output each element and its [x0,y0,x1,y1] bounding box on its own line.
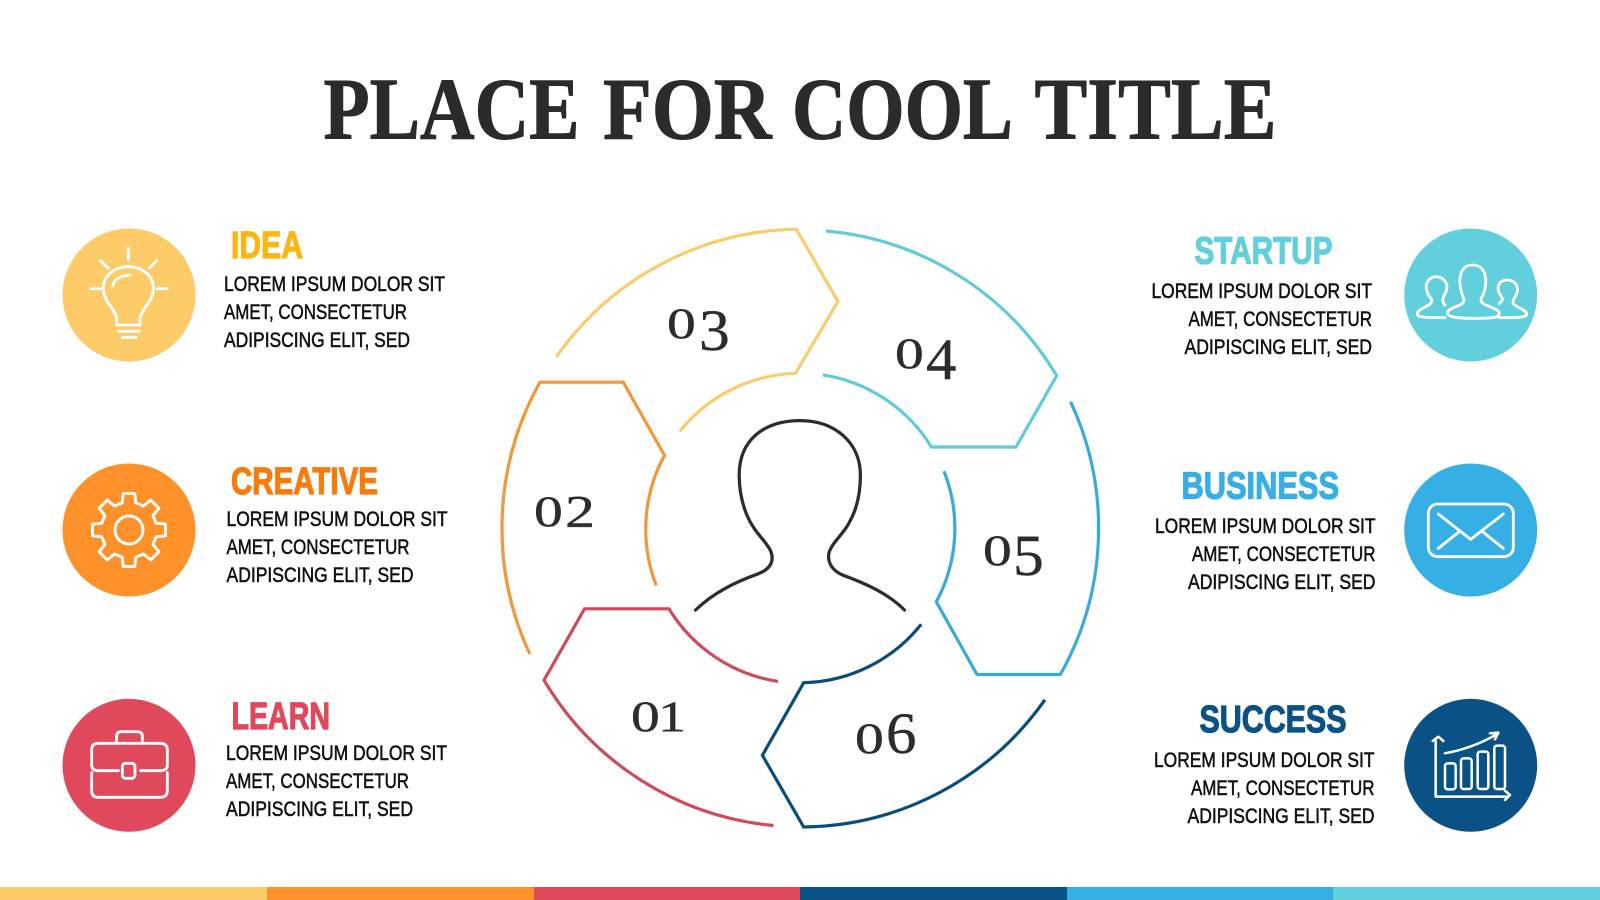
heading: idea: IDEA [231,225,303,267]
text: startup description: LOREM IPSUM DOLOR SIT [1152,280,1372,303]
icon: people [1417,265,1527,318]
title: TITLE [1034,62,1276,158]
text: 2 [565,486,595,536]
text: success description: ADIPISCING ELIT, SED [1188,805,1374,828]
text: startup description: ADIPISCING ELIT, SED [1184,336,1372,359]
number 05 [982,522,1044,588]
icon: envelope [1428,504,1513,557]
text: 0 [894,331,923,378]
text: 4 [926,327,956,392]
segment 06 outline [762,624,1045,827]
icon: briefcase [92,732,167,797]
heading: success: SUCCESS [1200,699,1346,741]
title: COOL [792,62,1013,158]
text: 1 [658,694,686,741]
number 01 [630,694,686,741]
text: 3 [699,298,730,363]
bottom colour bar [0,887,1600,900]
text: learn description: LOREM IPSUM DOLOR SIT [226,742,447,765]
segment 05 outline [936,402,1099,674]
text: creative description: LOREM IPSUM DOLOR SIT [226,508,448,531]
text: learn description [226,742,447,821]
number 03 [666,298,730,363]
heading: creative: CREATIVE [231,461,378,503]
text: 0 [630,694,659,741]
text: creative description [226,508,448,587]
title [324,62,1276,158]
title: FOR [603,62,773,158]
segment 04 outline [823,231,1057,447]
title: PLACE [324,62,580,158]
text: business description: LOREM IPSUM DOLOR SIT [1155,515,1376,538]
icon: light bulb [91,248,167,337]
icon: bar chart with rising arrow [1433,733,1510,800]
icon: person silhouette [696,421,904,610]
text: business description: AMET, CONSECTETUR [1192,543,1376,566]
text: 6 [886,701,916,766]
text: success description: AMET, CONSECTETUR [1191,777,1374,800]
text: startup description: AMET, CONSECTETUR [1188,308,1372,331]
circle: creative [62,464,196,596]
text: idea description: ADIPISCING ELIT, SED [224,329,410,352]
text: 0 [982,528,1011,575]
segment 02 outline [502,382,664,654]
segment 03 outline [556,229,838,432]
number 04 [894,327,956,392]
text: business description [1155,515,1376,594]
heading: startup: STARTUP [1194,230,1332,272]
number 06 [854,701,916,766]
text: idea description: LOREM IPSUM DOLOR SIT [224,273,445,296]
text: 5 [1013,522,1044,588]
text: idea description [224,273,445,352]
text: success description: LOREM IPSUM DOLOR SIT [1154,749,1375,772]
segment 01 outline [544,609,778,826]
icon: gear [92,493,166,567]
text: creative description: ADIPISCING ELIT, SED [226,564,414,587]
text: 0 [854,716,883,762]
number 02 [534,486,595,536]
circle: business [1404,464,1537,596]
circle: idea [62,228,196,362]
text: business description: ADIPISCING ELIT, SED [1188,571,1376,594]
text: startup description [1152,280,1372,359]
circle: learn [62,699,196,832]
text: idea description: AMET, CONSECTETUR [224,301,407,324]
circle: startup [1404,228,1537,362]
text: success description [1154,749,1375,828]
circle: success [1404,699,1537,832]
heading: learn: LEARN [232,696,330,738]
heading: business: BUSINESS [1182,466,1339,508]
text: 0 [534,488,562,536]
text: learn description: ADIPISCING ELIT, SED [226,798,413,821]
text: 0 [666,301,695,348]
text: learn description: AMET, CONSECTETUR [226,770,409,793]
text: creative description: AMET, CONSECTETUR [226,536,410,559]
